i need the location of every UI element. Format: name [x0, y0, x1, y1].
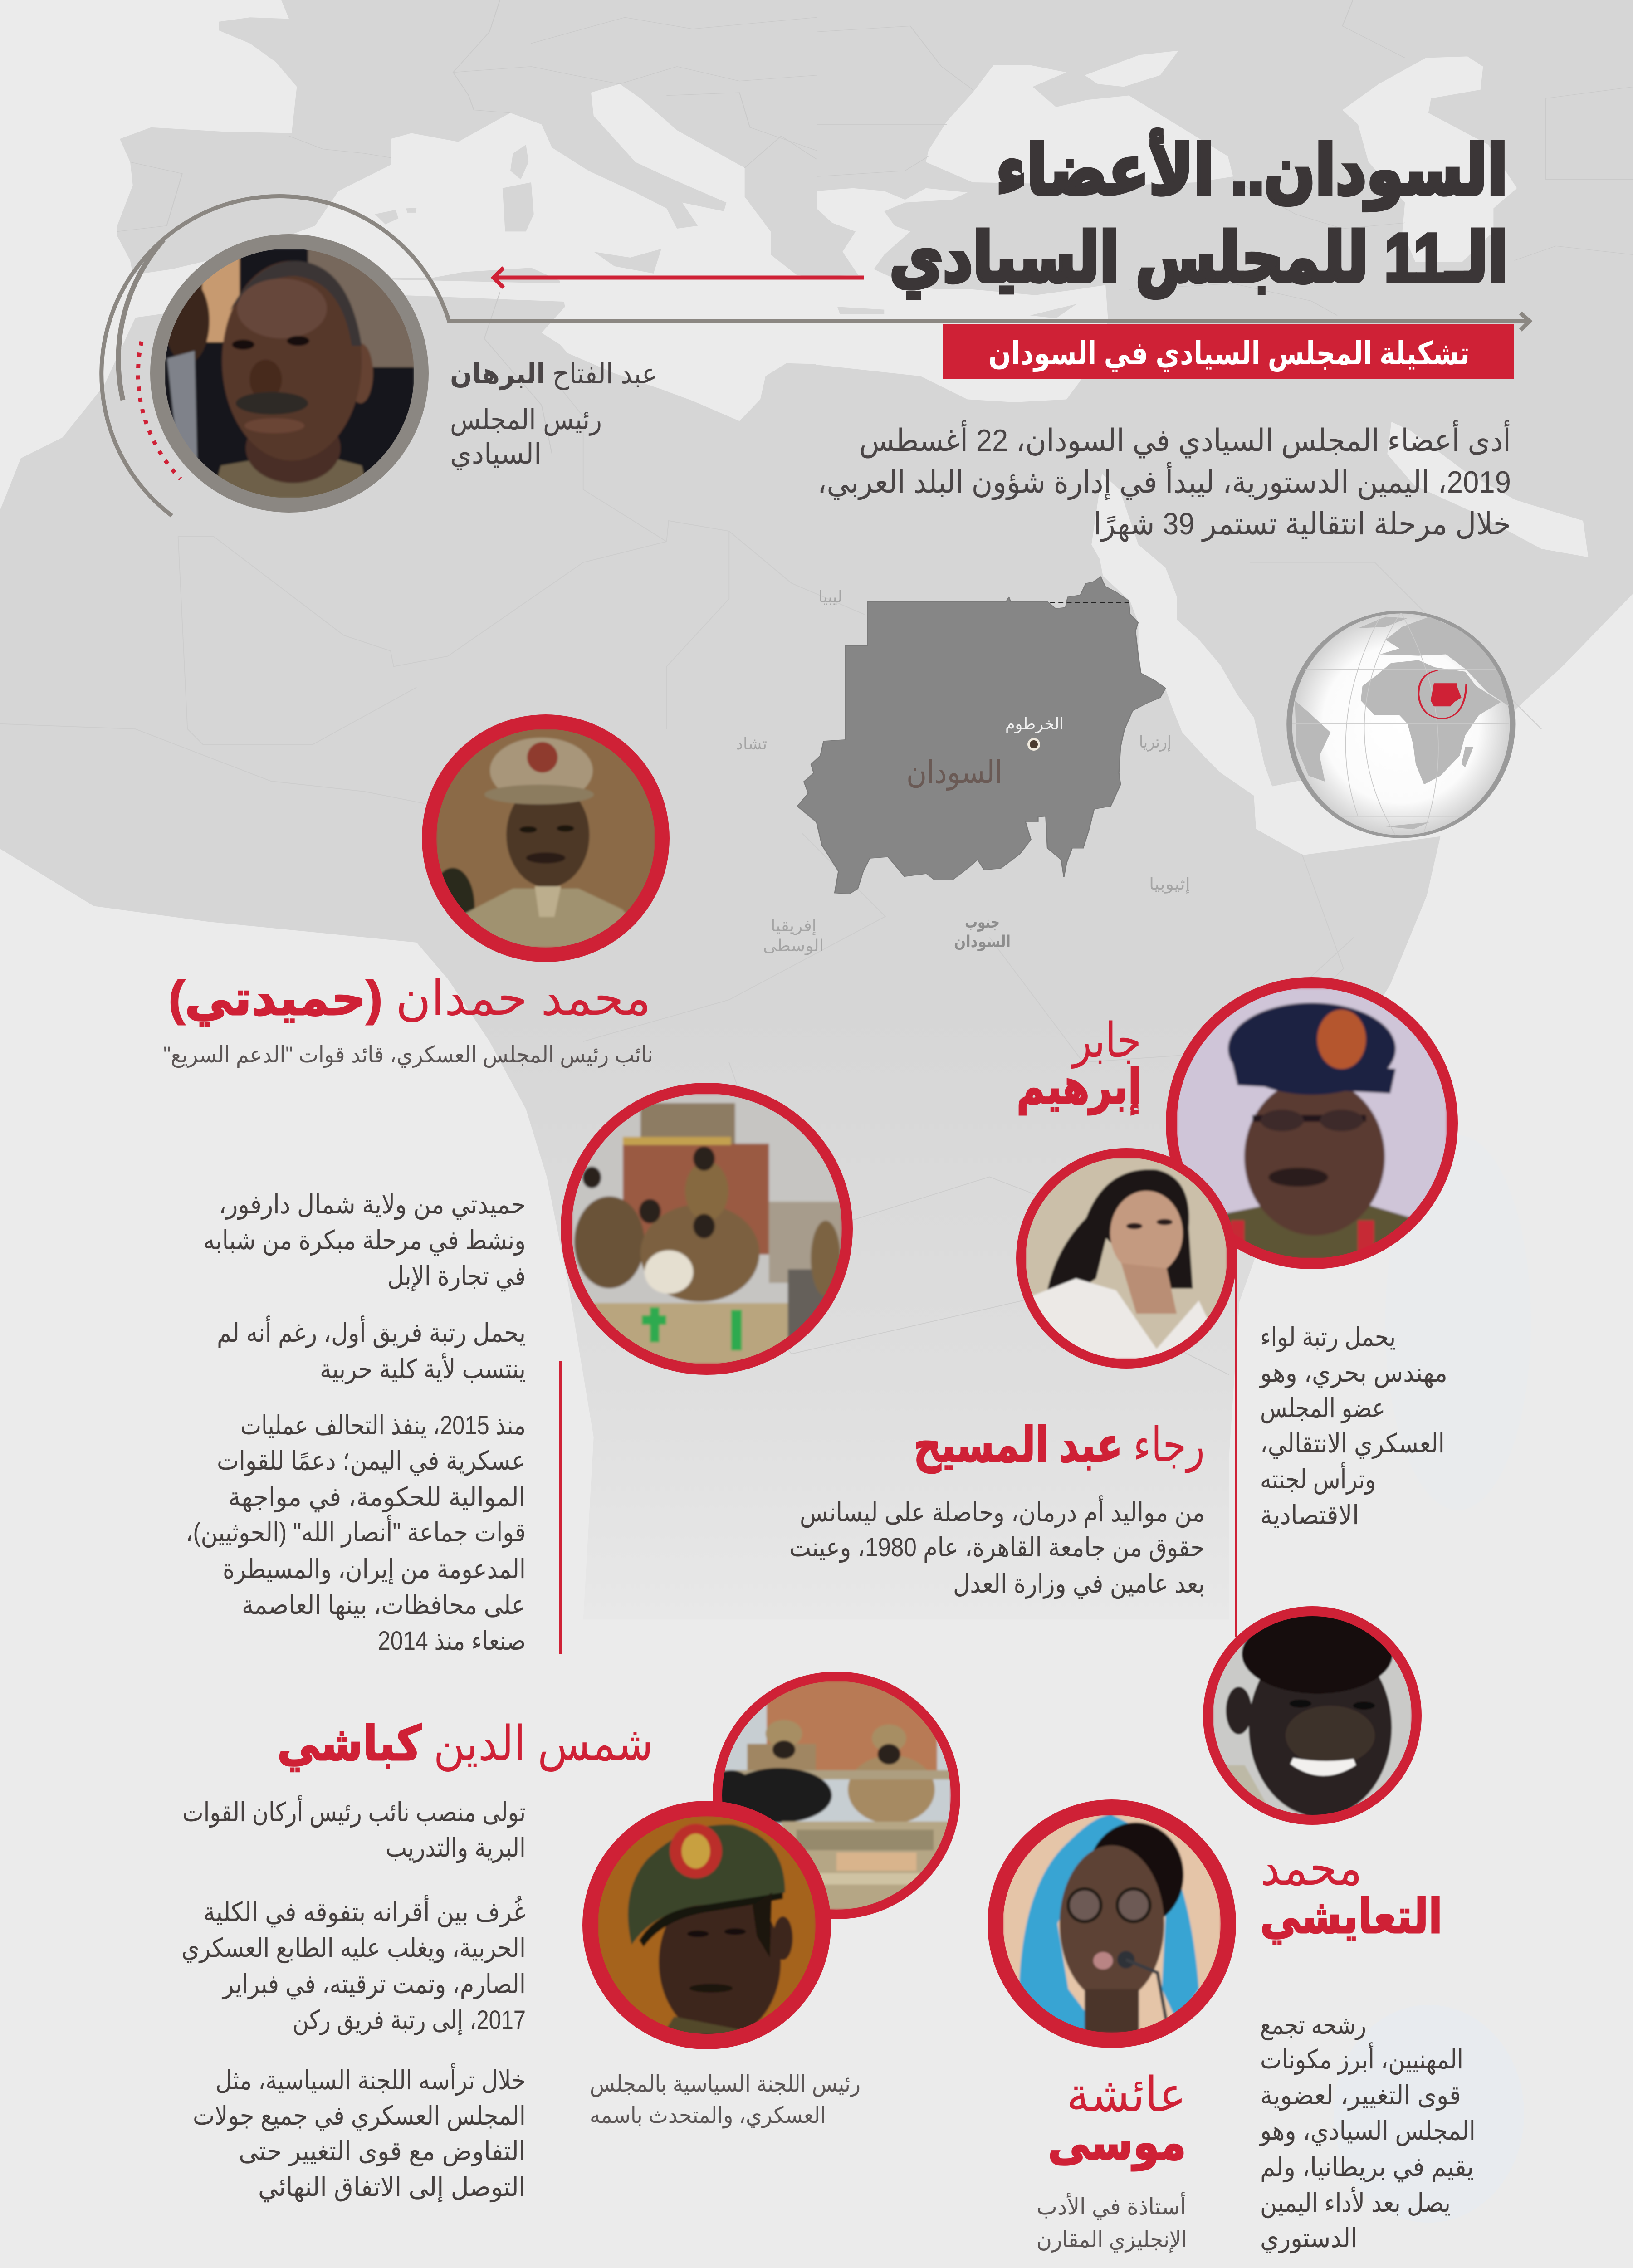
kabashi biography: تولى منصب نائب رئيس أركان القوات [182, 1795, 526, 1828]
vertical rule: jaber [1235, 1148, 1237, 1637]
burhan portrait [150, 234, 429, 513]
map labels: السودان [906, 754, 1002, 791]
hemedti role: نائب رئيس المجلس العسكري، قائد قوات "الدعم السريع" [163, 1042, 653, 1068]
taayshi biography: يقيم في بريطانيا، ولم [1260, 2152, 1474, 2183]
photo: rapid support forces on truck [561, 1083, 853, 1375]
map labels [736, 587, 1190, 955]
jaber name [1017, 1014, 1141, 1115]
hemedti biography: عسكرية في اليمن؛ دعمًا للقوات [217, 1446, 526, 1476]
burhan role: رئيس المجلس [450, 404, 602, 436]
map of sudan [736, 577, 1190, 955]
hemedti biography: صنعاء منذ 2014 [378, 1626, 526, 1656]
kabashi biography: الحربية، ويغلب عليه الطابع العسكري [181, 1933, 526, 1964]
jaber biography [1259, 1322, 1447, 1530]
hemedti biography [186, 1190, 526, 1656]
map labels: إفريقيا [771, 916, 816, 935]
locator globe [1289, 612, 1512, 836]
panel: raja abdel masih [789, 1148, 1237, 1599]
map labels: جنوب [965, 913, 1000, 932]
taayshi biography [1259, 2010, 1476, 2268]
aisha role: أستاذة في الأدب [1037, 2192, 1186, 2220]
title [890, 129, 1508, 298]
kabashi name: شمس الدين كباشي [277, 1717, 653, 1772]
hemedti biography: ينتسب لأية كلية حربية [320, 1353, 526, 1385]
kabashi role: رئيس اللجنة السياسية بالمجلس [590, 2071, 861, 2097]
jaber biography: مهندس بحري، وهو [1259, 1358, 1447, 1388]
intro text: 2019، اليمين الدستورية، ليبدأ في إدارة شؤون البلد العربي، [817, 462, 1511, 500]
map labels: إثيوبيا [1149, 875, 1190, 894]
kabashi biography: غُرف بين أقرانه بتفوقه في الكلية [203, 1895, 526, 1928]
aisha portrait [988, 1799, 1236, 2048]
jaber biography: العسكري الانتقالي، [1260, 1429, 1445, 1459]
photo: soldiers waving [709, 1672, 960, 1919]
jaber biography: وترأس لجنته [1260, 1462, 1376, 1495]
raja biography: حقوق من جامعة القاهرة، عام 1980، وعينت [789, 1533, 1205, 1563]
burhan ornament arcs [102, 196, 1530, 516]
aisha name: عائشة [1066, 2068, 1186, 2121]
jaber biography: عضو المجلس [1260, 1393, 1385, 1424]
taayshi name [1260, 1842, 1442, 1945]
intro text: أدى أعضاء المجلس السيادي في السودان، 22 أغسطس [859, 420, 1511, 459]
hemedti biography: الموالية للحكومة، في مواجهة [228, 1482, 526, 1513]
intro text: خلال مرحلة انتقالية تستمر 39 شهرًا [1094, 507, 1511, 542]
vertical rule: hemedti [559, 1361, 562, 1654]
kabashi role [590, 2071, 861, 2129]
panel: aisha musa [894, 1799, 1236, 2268]
taayshi biography: الدستوري [1260, 2224, 1357, 2254]
khartoum marker [1027, 738, 1040, 751]
sudan shape [797, 577, 1166, 894]
aisha name: موسى [1048, 2116, 1186, 2171]
hemedti biography: المدعومة من إيران، والمسيطرة [223, 1554, 526, 1585]
panel: mohamed al-taayshi [1203, 1606, 1476, 2268]
jaber name: إبرهيم [1017, 1060, 1141, 1115]
kabashi biography: الصارم، وتمت ترقيته، في فبراير [221, 1970, 526, 2000]
map labels: تشاد [736, 734, 767, 753]
jaber name: جابر [1071, 1014, 1141, 1069]
taayshi biography: المهنيين، أبرز مكونات [1260, 2042, 1463, 2075]
title: الـ11 للمجلس السيادي [890, 220, 1508, 298]
panel: burhan [150, 234, 657, 513]
map labels: ليبيا [818, 587, 842, 606]
raja biography: بعد عامين في وزارة العدل [953, 1569, 1205, 1599]
red arrow [494, 268, 864, 288]
hemedti name: محمد حمدان (حميدتي) [169, 972, 651, 1026]
hemedti biography: يحمل رتبة فريق أول، رغم أنه لم [217, 1315, 526, 1349]
taayshi biography: يصل بعد لأداء اليمين [1260, 2186, 1451, 2219]
hemedti biography: على محافظات، بينها العاصمة [242, 1590, 526, 1620]
subtitle banner: تشكيلة المجلس السيادي في السودان [988, 336, 1470, 372]
hemedti biography: قوات جماعة "أنصار الله" (الحوثيين)، [186, 1515, 526, 1548]
sudan highlight on globe [1418, 670, 1467, 719]
map labels: السودان [954, 932, 1011, 951]
hemedti portrait [422, 714, 670, 962]
taayshi biography: قوى التغيير، لعضوية [1260, 2081, 1461, 2111]
kabashi biography: التفاوض مع قوى التغيير حتى [239, 2136, 526, 2167]
aisha role [1037, 2192, 1187, 2253]
kabashi biography: البرية والتدريب [386, 1833, 526, 1863]
background map [0, 0, 1633, 1619]
hemedti biography: ونشط في مرحلة مبكرة من شبابه [203, 1226, 526, 1256]
taayshi portrait [1203, 1606, 1422, 1825]
kabashi portrait [582, 1801, 831, 2049]
raja biography [789, 1495, 1205, 1599]
panel: jaber ibrahim [1017, 977, 1458, 1530]
map labels: الوسطى [763, 936, 824, 955]
map labels: إرتريا [1139, 733, 1171, 752]
panel: shams al-din kabashi [181, 1717, 861, 2203]
taayshi biography: رشحه تجمع [1260, 2010, 1366, 2040]
faint right-side tint [1334, 2005, 1524, 2223]
taayshi name: محمد [1260, 1842, 1362, 1895]
burhan role [450, 404, 602, 470]
intro text [817, 420, 1511, 542]
taayshi name: التعايشي [1260, 1890, 1442, 1945]
aisha name [1048, 2068, 1186, 2171]
panel: hemedti [163, 714, 670, 1068]
taayshi biography: المجلس السيادي، وهو [1259, 2116, 1476, 2146]
jaber portrait [1166, 977, 1458, 1269]
subtitle banner [943, 324, 1514, 379]
hemedti biography: منذ 2015، ينفذ التحالف عمليات [240, 1411, 526, 1440]
raja portrait [1016, 1148, 1237, 1369]
kabashi biography: التوصل إلى الاتفاق النهائي [258, 2172, 526, 2203]
burhan role: السيادي [450, 439, 542, 470]
burhan name: عبد الفتاح البرهان [450, 358, 657, 390]
kabashi biography [181, 1795, 526, 2203]
hemedti biography: حميدتي من ولاية شمال دارفور، [219, 1190, 526, 1220]
kabashi role: العسكري، والمتحدث باسمه [590, 2102, 826, 2129]
kabashi biography: خلال ترأسه اللجنة السياسية، مثل [215, 2063, 526, 2096]
raja biography: من مواليد أم درمان، وحاصلة على ليسانس [800, 1495, 1205, 1528]
kabashi biography: 2017، إلى رتبة فريق ركن [293, 2005, 526, 2036]
jaber biography: الاقتصادية [1260, 1501, 1359, 1530]
title: السودان.. الأعضاء [996, 129, 1508, 210]
map labels: الخرطوم [1005, 714, 1064, 733]
raja name: رجاء عبد المسيح [914, 1418, 1205, 1473]
jaber biography: يحمل رتبة لواء [1260, 1322, 1396, 1353]
kabashi biography: المجلس العسكري في جميع جولات [193, 2101, 526, 2131]
hemedti biography: في تجارة الإبل [387, 1261, 526, 1292]
aisha role: الإنجليزي المقارن [1037, 2227, 1187, 2253]
